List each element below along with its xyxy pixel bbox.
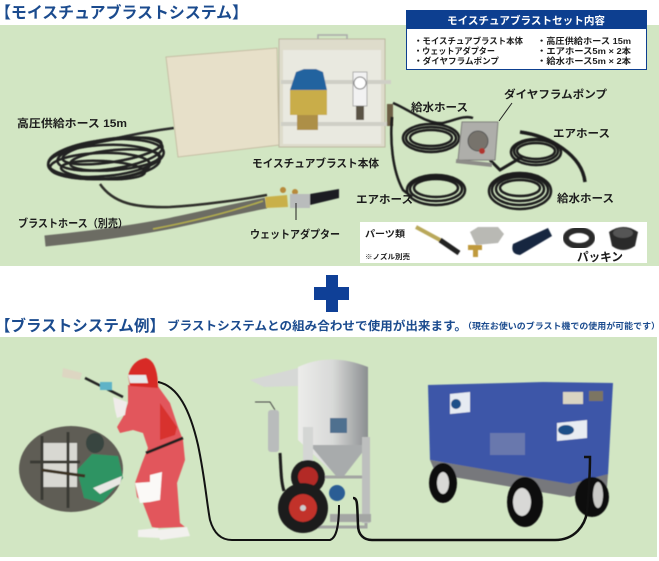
labels: equipment: 給水ホース [411, 100, 468, 114]
labels: equipment: エアホース [553, 127, 610, 140]
panel: moisture blast system background [0, 25, 659, 266]
diaphragm pump body [458, 122, 498, 160]
icon: packing cup [609, 227, 638, 250]
panel: set contents: ・高圧供給ホース 15m [537, 36, 631, 46]
leader lines [296, 103, 512, 220]
panel: parts [360, 222, 647, 264]
wet adapter [265, 187, 339, 208]
icon: blue nozzle part [512, 228, 552, 255]
panel: set contents: ・モイスチュアブラスト本体 [414, 36, 523, 46]
icon: plus sign [314, 275, 349, 312]
air hoses [158, 382, 590, 540]
panel: parts: パッキン [577, 250, 623, 264]
figure: blasting operator in red suit [62, 358, 190, 540]
coil: air hose upper [511, 139, 561, 165]
panel: set contents: ・給水ホース5m × 2本 [537, 56, 632, 66]
icon: nozzle part [416, 227, 459, 253]
heading: blast system example: ブラストシステムとの組み合わせで使用が出来ます。 [167, 318, 467, 333]
labels: equipment: ダイヤフラムポンプ [504, 87, 607, 101]
panel: parts: パーツ類 [365, 228, 405, 239]
panel: set contents [406, 10, 647, 70]
coil: water hose upper [403, 124, 459, 152]
heading: blast system example: 【ブラストシステム例】 [0, 316, 165, 335]
high-pressure hose coil and blast hose [45, 128, 267, 241]
hoses and diaphragm pump [391, 103, 585, 209]
panel: set contents: ・ダイヤフラムポンプ [414, 56, 499, 66]
glove [113, 397, 127, 418]
heading: blast system example [0, 316, 659, 335]
harness [146, 438, 183, 453]
panel: parts: ※ノズル別売 [365, 252, 410, 261]
knee pads [135, 482, 150, 503]
blast spray [62, 368, 82, 380]
panel: set contents: ・エアホース5m × 2本 [537, 46, 632, 56]
suit [117, 385, 185, 528]
helmet [128, 358, 158, 388]
labels: equipment: 給水ホース [557, 191, 614, 205]
panel: set contents: モイスチュアブラストセット内容 [447, 14, 606, 27]
labels: equipment: ウェットアダプター [250, 227, 340, 241]
title: moisture blast system: 【モイスチュアブラストシステム】 [0, 3, 248, 22]
panel: blast system example background [0, 337, 657, 557]
labels: equipment: エアホース [356, 193, 413, 206]
boots [138, 528, 160, 538]
labels: equipment: ブラストホース（別売） [18, 216, 128, 230]
heading: blast system example: （現在お使いのブラスト機での使用が可能です） [463, 321, 659, 331]
panel: set contents: ・ウェットアダプター [414, 46, 495, 56]
labels: equipment: 高圧供給ホース 15m [17, 116, 127, 130]
coil: water hose lower [489, 173, 551, 209]
figure: blast pot [250, 360, 371, 533]
photo: worker inset [19, 426, 123, 512]
labels: equipment [17, 87, 614, 241]
figure: air compressor [428, 382, 613, 527]
icon: packing ring [566, 230, 592, 246]
coil: air hose lower [407, 175, 465, 205]
cabinet: moisture blast main unit [166, 35, 393, 157]
labels: equipment: モイスチュアブラスト本体 [252, 156, 379, 170]
icon: adapter part [468, 227, 504, 257]
